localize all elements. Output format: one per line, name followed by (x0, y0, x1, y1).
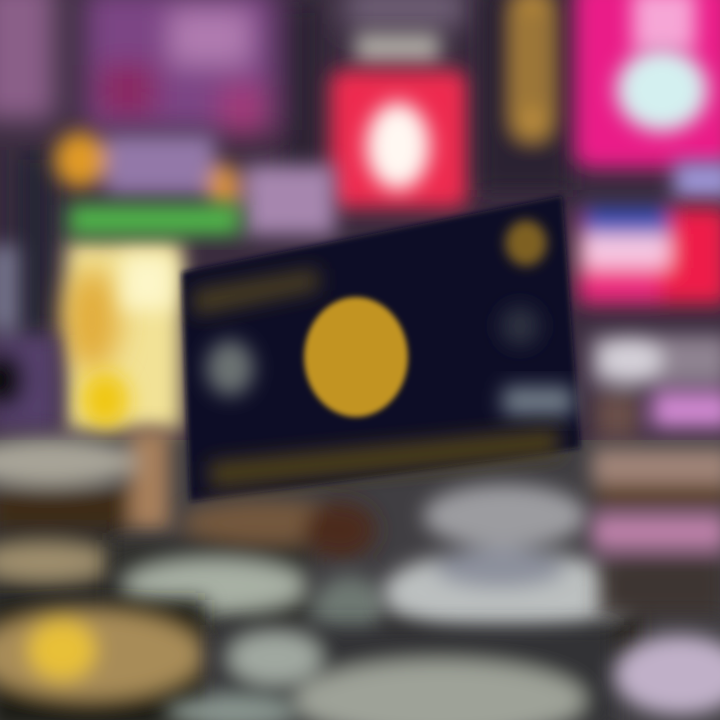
background: right red, white and blue sign (578, 208, 720, 304)
coin stacks (0, 430, 720, 720)
card grey label (502, 386, 574, 416)
background: left dark and purple column (0, 245, 58, 430)
background: red sign with white glow (330, 32, 468, 208)
background: top-left pink and purple signs (0, 0, 465, 340)
background: magenta sign with pale centre (574, 0, 720, 198)
bottom-right lilac coin (614, 635, 720, 715)
credit card (182, 196, 580, 502)
right large silver coins (383, 484, 640, 669)
background: lavender shelf and orange lights (54, 132, 335, 235)
card body (182, 196, 580, 502)
card gold emblem (304, 297, 408, 417)
left coin stack (0, 430, 170, 610)
centre copper coins (110, 500, 386, 644)
right pink coin stack (592, 448, 720, 616)
card brand text smear (192, 268, 320, 316)
bottom-left gold coin (0, 600, 205, 720)
card number smear (208, 428, 560, 488)
card grey dot (500, 306, 540, 346)
bottom centre coins (164, 625, 615, 720)
background: gold vertical sign (480, 0, 570, 190)
background: green and yellow stall (64, 205, 240, 430)
background: right shelves (590, 335, 720, 438)
card grey emblem (206, 340, 254, 396)
card gold dot (505, 220, 547, 266)
